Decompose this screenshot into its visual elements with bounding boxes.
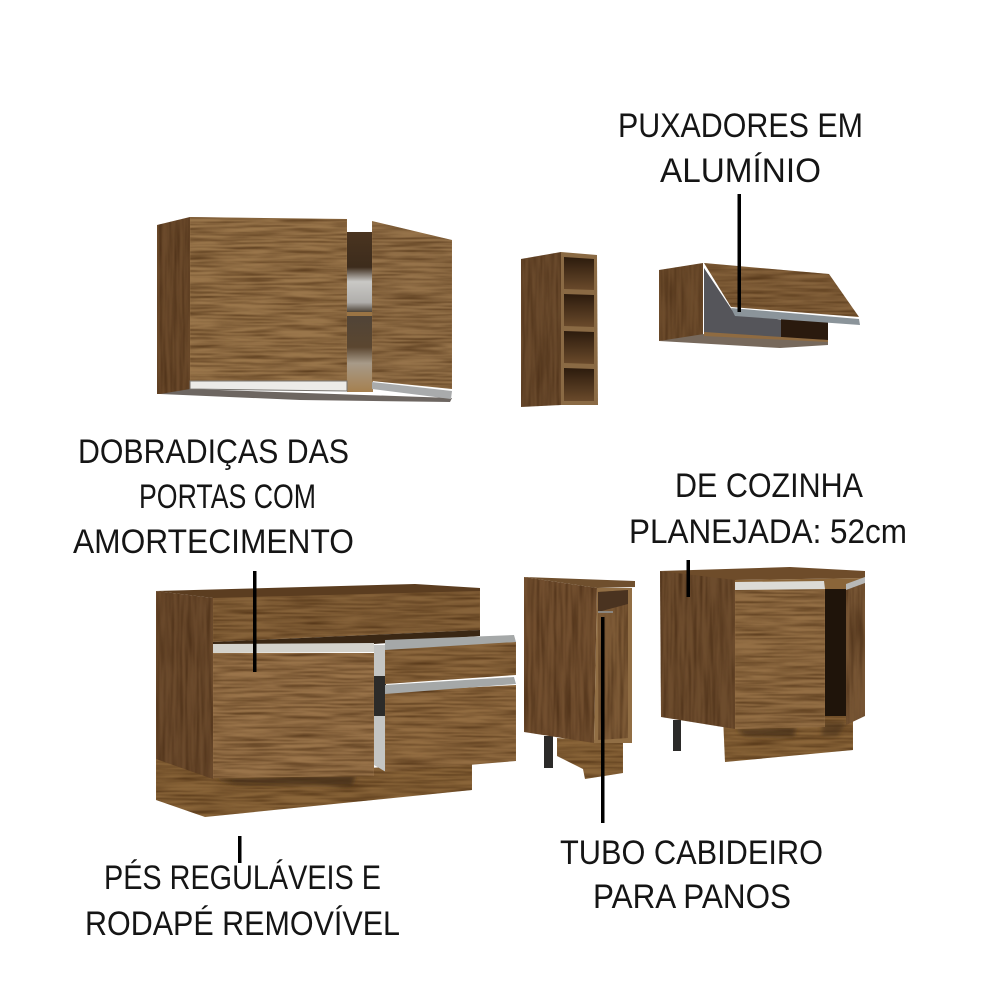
leader line: profundidade: [686, 560, 690, 597]
lower drawer handle: [385, 677, 516, 694]
corner cabinet top: [660, 567, 865, 580]
label: dobradicas: DOBRADIÇAS DAS: [78, 433, 349, 471]
open door handle: [372, 382, 452, 399]
corner cabinet door: [735, 589, 825, 729]
corner cabinet plinth shadow: [735, 727, 796, 737]
niche front frame: [561, 252, 598, 405]
flip cabinet underside: [659, 334, 828, 348]
narrow cabinet top: [524, 577, 635, 588]
flip cabinet side panel: [659, 263, 703, 341]
label: pes regulaveis: RODAPÉ REMOVÍVEL: [85, 905, 400, 943]
label: tubo cabideiro: [560, 834, 823, 916]
flip door handle: [731, 308, 860, 325]
niche compartment 2: [564, 294, 594, 327]
label: dobradicas: [73, 433, 354, 561]
label: dobradicas: PORTAS COM: [139, 478, 316, 516]
narrow cabinet side: [524, 577, 597, 743]
niche compartment 1: [564, 257, 594, 290]
leader line: puxadores: [738, 194, 741, 312]
label: puxadores em aluminio: PUXADORES EM: [618, 107, 863, 145]
base cabinet: door and drawers: [156, 584, 516, 817]
top strip: [156, 584, 480, 598]
narrow cabinet front frame: [594, 588, 632, 743]
cabinet interior: [347, 232, 373, 392]
wall cabinet: flip-up door: [659, 263, 860, 348]
wall cabinet: two doors: [157, 217, 452, 402]
upper drawer: [385, 642, 516, 684]
niche compartment 4: [564, 368, 594, 401]
label: profundidade cozinha: [629, 467, 907, 551]
leader line: pes: [238, 836, 242, 863]
narrow cabinet plinth: [557, 738, 623, 779]
cabinet side panel: [157, 217, 190, 394]
narrow cabinet interior: [598, 590, 628, 740]
flip cabinet floor strip: [704, 332, 828, 342]
closed door handle: [190, 381, 347, 391]
cabinet underside: [160, 389, 452, 402]
corner cabinet door handle: [735, 581, 825, 590]
narrow base cabinet: [524, 577, 635, 779]
narrow open niche unit: [521, 252, 598, 407]
label: pes regulaveis: PÉS REGULÁVEIS E: [104, 859, 381, 897]
flip cabinet grey interior: [704, 268, 782, 338]
label: dobradicas: AMORTECIMENTO: [73, 523, 354, 561]
corner cabinet open door handle: [846, 577, 865, 590]
flip cabinet dark interior: [781, 319, 828, 340]
drawer gap: [213, 630, 480, 644]
base side panel: [156, 591, 213, 779]
dark gap between drawers: [374, 676, 386, 716]
label: profundidade cozinha: PLANEJADA: 52cm: [629, 513, 907, 551]
open door: [372, 221, 452, 389]
corner cabinet plinth: [723, 714, 853, 762]
drawer runners: [374, 645, 386, 772]
niche compartment 3: [564, 331, 594, 364]
corner cabinet top band: [735, 578, 865, 590]
corner cabinet leg: [673, 720, 681, 751]
back panel: [213, 590, 480, 642]
leader line: dobradicas: [253, 571, 256, 672]
corner cabinet second shadow: [822, 722, 846, 736]
corner cabinet dark interior: [825, 589, 847, 716]
left door handle: [213, 643, 374, 653]
lower drawer: [385, 685, 516, 772]
label: puxadores em aluminio: [618, 107, 863, 190]
corner cabinet open door: [846, 580, 865, 725]
label: profundidade cozinha: DE COZINHA: [675, 467, 863, 505]
label: tubo cabideiro: TUBO CABIDEIRO: [560, 834, 823, 872]
closed door: [190, 217, 347, 381]
hanging rail: [598, 611, 613, 613]
niche side panel: [521, 252, 561, 407]
label: pes regulaveis: [85, 859, 400, 943]
cabinet inner shelf: [347, 312, 373, 316]
flip door: [704, 263, 859, 317]
corner cabinet side: [660, 571, 735, 729]
narrow cabinet inner top shadow: [598, 590, 628, 612]
upper drawer handle: [385, 635, 516, 650]
plinth: [156, 757, 472, 817]
plinth shadow: [213, 775, 356, 786]
corner base cabinet: [660, 567, 865, 762]
label: puxadores em aluminio: ALUMÍNIO: [660, 152, 821, 190]
narrow cabinet leg: [544, 736, 553, 768]
label: tubo cabideiro: PARA PANOS: [593, 878, 791, 916]
leader line: tubo: [601, 617, 604, 823]
left door: [213, 653, 374, 778]
